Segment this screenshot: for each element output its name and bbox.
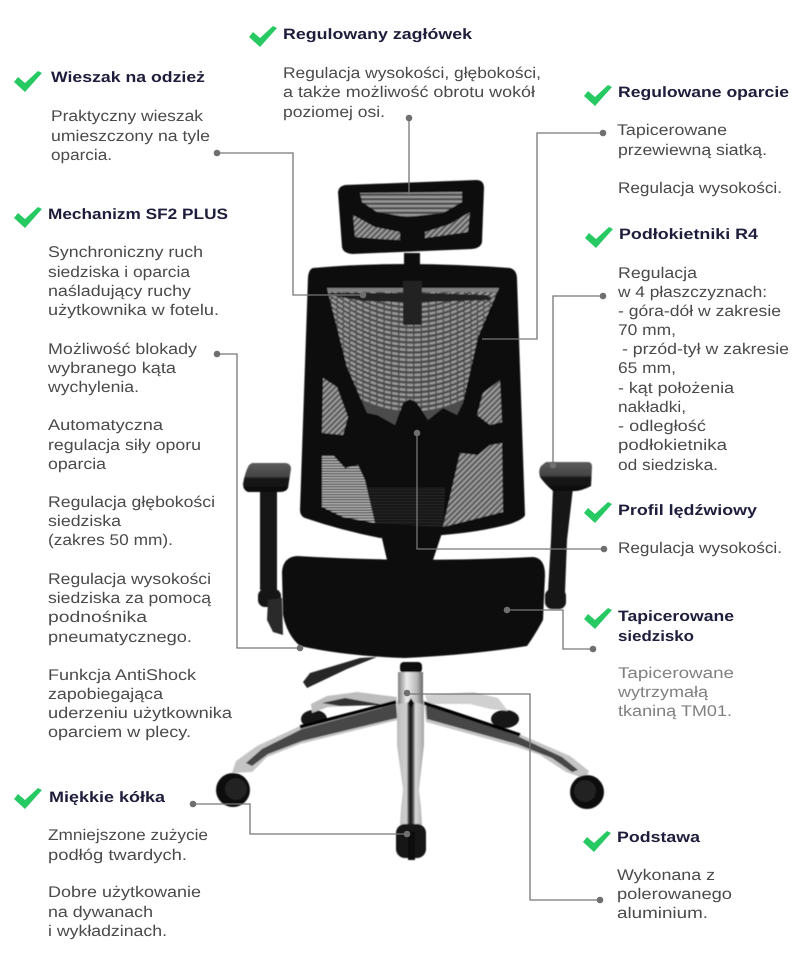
text block: na dywanach xyxy=(48,904,153,921)
text block: Praktyczny wieszak xyxy=(51,108,203,125)
panel: R4 armrests xyxy=(585,226,789,474)
left armrest xyxy=(243,463,291,635)
text block: siedziska xyxy=(48,513,121,530)
backrest xyxy=(300,240,525,560)
text block: a także możliwość obrotu wokół xyxy=(283,84,536,101)
star base front left leg xyxy=(232,701,398,773)
text block: Regulacja wysokości xyxy=(48,571,211,588)
text block: Możliwość blokady xyxy=(48,341,197,358)
text block: oparcia. xyxy=(51,147,112,164)
seat xyxy=(282,556,545,658)
leader: armrest xyxy=(550,293,606,468)
text block: siedziska za pomocą xyxy=(48,590,211,607)
tilt lever xyxy=(303,657,377,688)
heading: Regulowane oparcie xyxy=(618,84,789,101)
text block: przewiewną siatką. xyxy=(618,142,767,159)
panel: coat hanger xyxy=(14,69,210,164)
text block: siedziska i oparcia xyxy=(48,264,190,281)
leader: lumbar profile xyxy=(414,430,607,552)
office chair photo xyxy=(216,180,604,860)
panel: adjustable backrest xyxy=(584,84,789,197)
heading: Miękkie kółka xyxy=(49,789,166,806)
text block: pneumatycznego. xyxy=(48,629,192,646)
text block: podłokietnika xyxy=(618,437,727,454)
text block: nakładki, xyxy=(618,399,686,416)
text block: użytkownika w fotelu. xyxy=(48,302,219,319)
heading: Mechanizm SF2 PLUS xyxy=(48,206,228,223)
text block xyxy=(617,867,732,922)
headrest xyxy=(338,180,484,254)
text block: Regulacja wysokości, głębokości, xyxy=(283,65,541,82)
back mesh lower panels xyxy=(322,455,375,523)
text block: - odległość xyxy=(618,418,706,435)
heading: siedzisko xyxy=(618,628,694,645)
text block: Regulacja głębokości xyxy=(48,494,215,511)
text block: i wykładzinach. xyxy=(48,923,167,940)
text block: Funkcja AntiShock xyxy=(48,667,196,684)
heading: Profil lędźwiowy xyxy=(618,502,758,519)
icon: check xyxy=(14,788,42,809)
back mesh centre xyxy=(326,287,500,426)
text block: podłóg twardych. xyxy=(48,847,187,864)
heading: Regulowany zagłówek xyxy=(283,26,473,43)
text block: Regulacja wysokości. xyxy=(618,180,782,197)
hanger bracket xyxy=(329,281,492,325)
text block: - kąt położenia xyxy=(618,380,734,397)
text block: tkaniną TM01. xyxy=(618,703,732,720)
text block: wybranego kąta xyxy=(47,360,176,377)
icon: check xyxy=(14,71,42,92)
star base rear legs xyxy=(301,692,519,728)
text block: Wykonana z xyxy=(617,867,715,884)
text block: - góra-dół w zakresie xyxy=(618,303,781,320)
text block: poziomej osi. xyxy=(283,104,385,121)
leader: backrest xyxy=(482,130,606,339)
leader: base xyxy=(404,690,603,903)
text block xyxy=(283,65,541,121)
text block: umieszczony na tyle xyxy=(51,128,210,145)
text block: w 4 płaszczyznach: xyxy=(617,284,767,301)
text block: wychylenia. xyxy=(47,379,139,396)
icon: check xyxy=(249,26,277,47)
right armrest xyxy=(539,462,592,609)
text block: Zmniejszone zużycie xyxy=(48,827,208,844)
leader: seat xyxy=(504,607,596,652)
text block xyxy=(51,108,210,164)
panel: lumbar profile xyxy=(584,502,782,557)
leader: coat hanger xyxy=(214,150,366,298)
panel: base xyxy=(583,829,732,922)
panel: soft casters xyxy=(14,788,208,940)
text block: Regulacja xyxy=(618,265,697,282)
text block: (zakres 50 mm). xyxy=(48,532,173,549)
text block: Synchroniczny ruch xyxy=(48,244,203,261)
text block: Automatyczna xyxy=(48,417,163,434)
heading: Podstawa xyxy=(617,829,701,846)
text block: wytrzymałą xyxy=(617,684,708,701)
text block: Dobre użytkowanie xyxy=(48,884,201,901)
heading: Tapicerowane xyxy=(618,608,734,625)
text block: uderzeniu użytkownika xyxy=(48,705,232,722)
text block: podnośnika xyxy=(48,609,147,626)
heading xyxy=(618,608,734,645)
back mesh side panels xyxy=(322,378,502,435)
icon: check xyxy=(14,207,42,228)
icon: check xyxy=(585,227,613,248)
heading: Wieszak na odzież xyxy=(51,69,205,86)
lower centre mesh shading xyxy=(368,487,445,527)
text block xyxy=(617,665,734,720)
text block: zapobiegająca xyxy=(48,686,163,703)
text block: regulacja siły oporu xyxy=(48,437,201,454)
leader: headrest xyxy=(406,115,412,195)
text block xyxy=(48,827,208,940)
star base front right leg xyxy=(424,701,589,779)
leader: casters xyxy=(190,801,410,837)
text block: - przód-tył w zakresie xyxy=(622,341,789,358)
text block xyxy=(617,122,782,197)
heading: Podłokietniki R4 xyxy=(619,226,759,243)
text block: oparcia xyxy=(48,456,106,473)
leader: mechanism xyxy=(214,351,303,651)
wheels xyxy=(216,773,604,860)
text block: Tapicerowane xyxy=(618,665,734,682)
text block: od siedziska. xyxy=(618,457,718,474)
central front leg xyxy=(397,700,424,825)
text block: polerowanego xyxy=(617,886,732,903)
text block xyxy=(47,244,232,741)
text block: Tapicerowane xyxy=(617,122,727,139)
panel: upholstered seat xyxy=(584,608,734,720)
icon: check xyxy=(584,608,612,629)
icon: check xyxy=(584,502,612,523)
text block: oparciem w plecy. xyxy=(48,724,191,741)
text block xyxy=(617,265,789,474)
text block: 65 mm, xyxy=(618,360,676,377)
panel: adjustable headrest xyxy=(249,26,541,121)
text block: aluminium. xyxy=(617,905,708,922)
text block: naśladujący ruchy xyxy=(48,283,191,300)
panel: SF2 PLUS mechanism xyxy=(14,206,232,741)
gas cylinder xyxy=(398,662,423,709)
icon: check xyxy=(584,85,612,106)
text block: 70 mm, xyxy=(618,322,676,339)
text block: Regulacja wysokości. xyxy=(618,540,782,557)
icon: check xyxy=(583,831,611,852)
